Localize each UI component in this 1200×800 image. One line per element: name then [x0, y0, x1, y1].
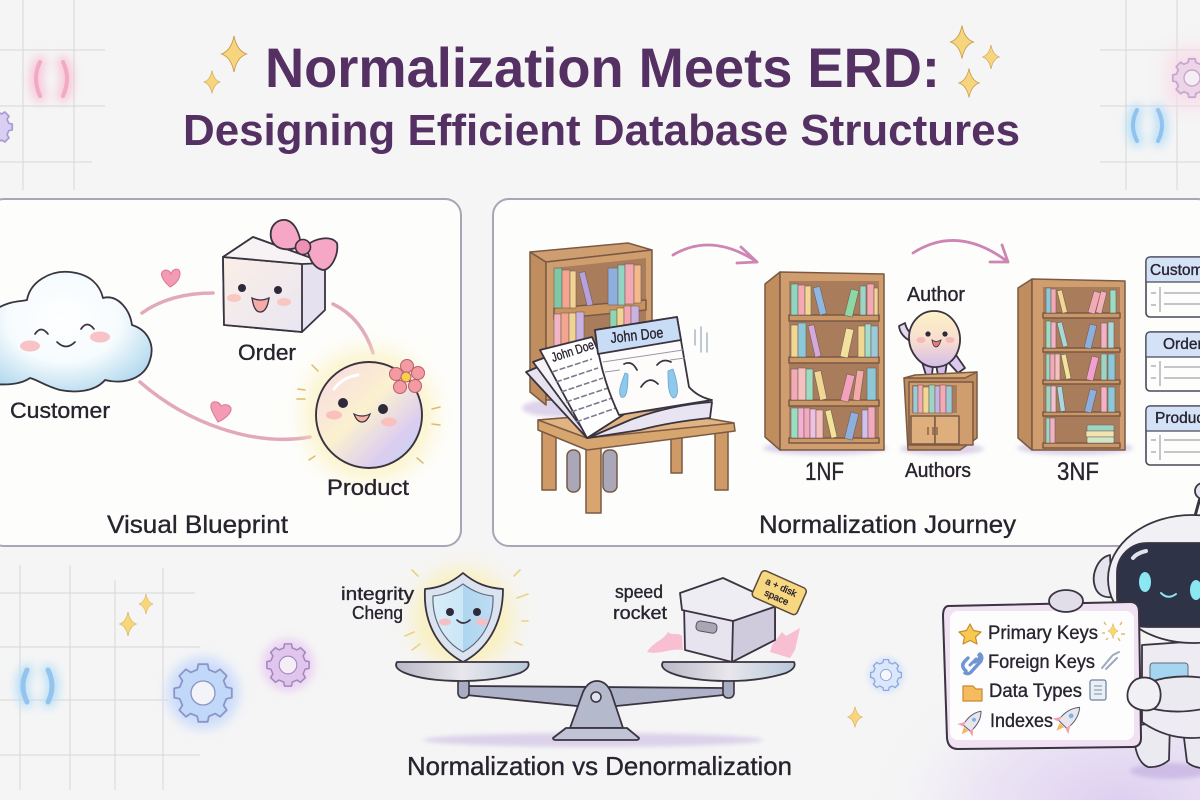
heading: Normalization vs Denormalization: Normalization vs Denormalization: [407, 751, 792, 781]
label: garbled integrity caption: Cheng: [352, 603, 403, 623]
sign item: Foreign Keys: Foreign Keys: [988, 651, 1095, 673]
crying record card: [595, 317, 712, 415]
decoration: sparkle bottom middle: [848, 706, 862, 728]
icon: chain link: [963, 654, 982, 674]
author character: [899, 311, 965, 375]
title: [183, 36, 1020, 155]
decoration: gear right edge: [1168, 50, 1200, 106]
icon: clipboard: [1090, 680, 1106, 700]
robot arm: [1150, 676, 1200, 712]
icon: folder: [963, 686, 982, 701]
robot ear: [1094, 555, 1112, 597]
sign hook: [1049, 590, 1083, 612]
panel: visual blueprint: [0, 199, 461, 546]
label: 3NF: 3NF: [1057, 458, 1099, 486]
robot mascot: [943, 483, 1200, 779]
label: John Doe card: John Doe: [610, 325, 664, 347]
heart top: [161, 269, 180, 287]
scale right pan: [662, 662, 795, 681]
decoration: blue parentheses bottom left: [22, 670, 53, 702]
heading: Visual Blueprint: Visual Blueprint: [107, 511, 288, 539]
robot helmet: [1108, 515, 1200, 643]
relationship lines: [140, 293, 373, 439]
robot chest screen: [1150, 663, 1188, 685]
scale beam: [466, 686, 724, 708]
robot visor: [1117, 543, 1200, 627]
icon: small wrench links: [1102, 652, 1119, 669]
icon: pink bow: [271, 220, 337, 270]
robot shadow: [1130, 763, 1200, 779]
sign item: Data Types: Data Types: [989, 680, 1082, 702]
heart bottom: [211, 402, 231, 422]
scale fulcrum: [553, 681, 639, 740]
robot legs: [1135, 722, 1170, 767]
table: [538, 410, 735, 513]
label: Customer: Customer: [10, 398, 110, 423]
label: integrity: integrity: [341, 584, 414, 604]
storage box: [680, 578, 777, 662]
icon: flower: [390, 360, 424, 394]
arrow to 3NF: [913, 240, 1008, 262]
table card: Product: [1146, 406, 1200, 465]
label: rocket: rocket: [613, 603, 667, 623]
decoration: pink parentheses: [36, 62, 67, 96]
label: Product: Product: [327, 475, 409, 500]
icon: rocket right: [1048, 700, 1087, 739]
title line 1: Normalization Meets ERD:: [265, 36, 940, 99]
decoration: blue gear: [167, 657, 239, 729]
icon: sparkle sun: [1102, 622, 1125, 641]
arrow to 1NF: [673, 245, 757, 263]
open book: [588, 402, 712, 438]
decoration: blue parentheses top right: [1133, 110, 1162, 141]
scale left pan: [396, 662, 529, 681]
sparkles around title: [204, 26, 999, 98]
heading: Normalization Journey: Normalization Journey: [759, 511, 1017, 539]
decoration: purple gear: [262, 639, 314, 691]
sign item: Primary Keys: Primary Keys: [988, 622, 1098, 644]
label: Authors: Authors: [905, 460, 971, 482]
label: John Doe back record: John Doe: [549, 337, 596, 365]
bookshelf 3NF: [1017, 279, 1133, 455]
sad records stack: [526, 337, 626, 438]
panel: normalization journey: [493, 199, 1200, 546]
unnormalized bookshelf: [522, 243, 652, 417]
label: speed: speed: [615, 582, 663, 602]
icon: order box: [223, 220, 337, 332]
table card: Order: [1146, 332, 1200, 391]
balance scale: normalization vs denormalization: [341, 568, 808, 781]
scale shadow: [423, 733, 763, 747]
label: 1NF: 1NF: [805, 458, 844, 486]
pink puff right: [770, 628, 800, 658]
robot body: [1142, 640, 1200, 738]
disk space tag: space: [763, 588, 790, 608]
label: Order: Order: [238, 340, 296, 365]
icon: star: [959, 624, 981, 644]
table card: Customer: [1146, 257, 1200, 317]
robot antenna: [1195, 483, 1200, 516]
icon: product bubble: [297, 349, 440, 481]
keys sign: [943, 602, 1141, 749]
scale left post: [458, 678, 469, 698]
decoration: gear left edge: [0, 109, 12, 145]
scale right post: [723, 678, 734, 698]
shield with face: [405, 568, 528, 668]
disk space tag: a + disk: [764, 576, 798, 600]
decoration: sparkles bottom left: [120, 594, 153, 636]
decoration: pale blue gear: [868, 657, 904, 693]
label: Author: Author: [907, 284, 965, 306]
pink puff left: [647, 632, 683, 653]
disk space tag: [751, 569, 808, 616]
icon: rocket left: [954, 705, 989, 741]
icon: customer cloud: [0, 272, 152, 391]
bookshelf 1NF: [763, 272, 887, 455]
title line 2: Designing Efficient Database Structures: [183, 106, 1020, 155]
sign item: Indexes: Indexes: [990, 710, 1053, 732]
robot hand: [1128, 677, 1161, 710]
authors cabinet: [900, 372, 984, 455]
